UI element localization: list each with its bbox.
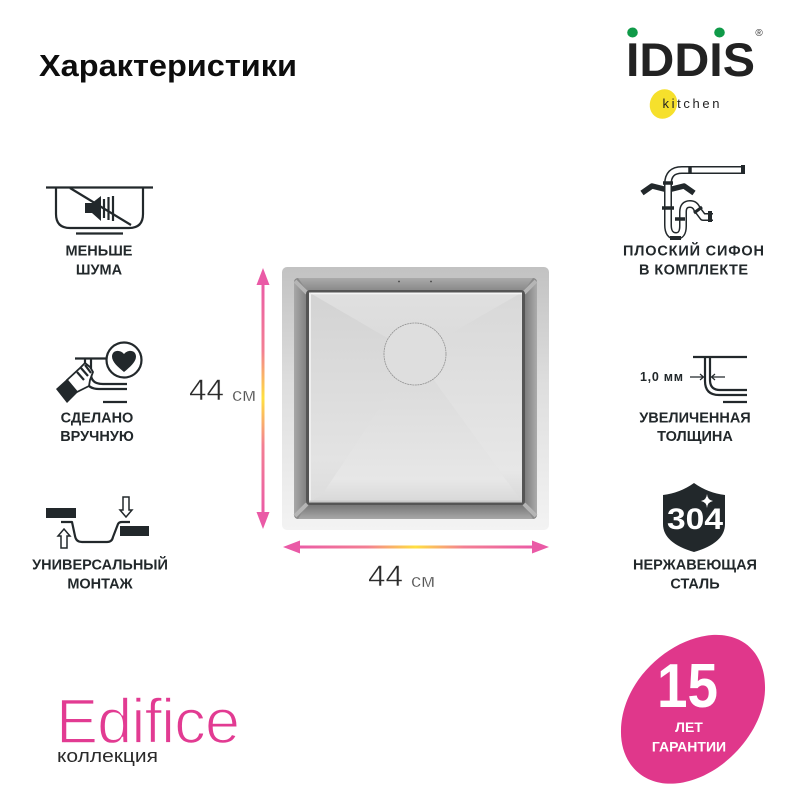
badge number: 15 [657, 652, 718, 721]
icon: 304 shield: 304 [667, 503, 723, 536]
logo wordmark: IDDIS [626, 33, 755, 86]
logo green dots [627, 28, 725, 38]
badge caption: ГАРАНТИИ [652, 738, 726, 754]
icon: handmade [56, 342, 142, 403]
collection label: коллекция [57, 745, 158, 766]
title: Характеристики [39, 48, 297, 83]
registered mark: ® [755, 28, 763, 39]
label: handmade: ВРУЧНУЮ [60, 429, 134, 445]
icon: siphon [642, 165, 745, 238]
kitchen wordmark: kitchen [662, 96, 720, 111]
label: flat siphon: В КОМПЛЕКТЕ [639, 262, 748, 278]
dimension: width: 44 [368, 560, 403, 593]
label: less noise: МЕНЬШЕ [66, 244, 133, 260]
drain [384, 323, 446, 385]
icon: thickness: 1,0 мм [640, 370, 683, 384]
yellow spot [645, 85, 682, 123]
label: thickness: ТОЛЩИНА [657, 429, 733, 445]
sink floor [306, 290, 525, 505]
siphon side inlets [642, 186, 694, 193]
icon: quiet sink [46, 188, 153, 234]
arrow: vertical dimension [256, 268, 270, 529]
label: universal mounting: МОНТАЖ [67, 576, 134, 592]
label: less noise: ШУМА [76, 262, 123, 278]
arrow: horizontal dimension [283, 540, 549, 554]
icon: thickness [640, 357, 747, 402]
siphon pipes outline [668, 170, 745, 236]
badge blob [621, 635, 765, 784]
sink walls [294, 278, 537, 519]
mounting holes [398, 281, 432, 282]
badge: warranty [621, 635, 765, 784]
icon: universal mounting [46, 497, 149, 548]
label: flat siphon: ПЛОСКИЙ СИФОН [623, 242, 764, 260]
label: handmade: СДЕЛАНО [61, 410, 133, 426]
logo: IDDIS kitchen [626, 28, 763, 123]
dimension: height [189, 374, 256, 407]
dimension: height: 44 [189, 374, 224, 407]
label: universal mounting: УНИВЕРСАЛЬНЫЙ [32, 556, 168, 574]
label: stainless steel: СТАЛЬ [670, 576, 720, 592]
sink rim [282, 267, 549, 530]
siphon pipes fill [668, 170, 745, 236]
dimension: height: см [232, 385, 256, 405]
dimension: width: см [411, 571, 435, 591]
label: thickness: УВЕЛИЧЕННАЯ [639, 410, 751, 426]
sink illustration [282, 267, 549, 530]
collection name: Edifice [56, 687, 240, 757]
badge caption: ЛЕТ [675, 719, 703, 735]
label: stainless steel: НЕРЖАВЕЮЩАЯ [633, 558, 757, 574]
dimension: width [368, 560, 435, 593]
icon: 304 shield [663, 483, 725, 552]
label: flat siphon [623, 242, 764, 278]
siphon couplings [662, 165, 743, 238]
